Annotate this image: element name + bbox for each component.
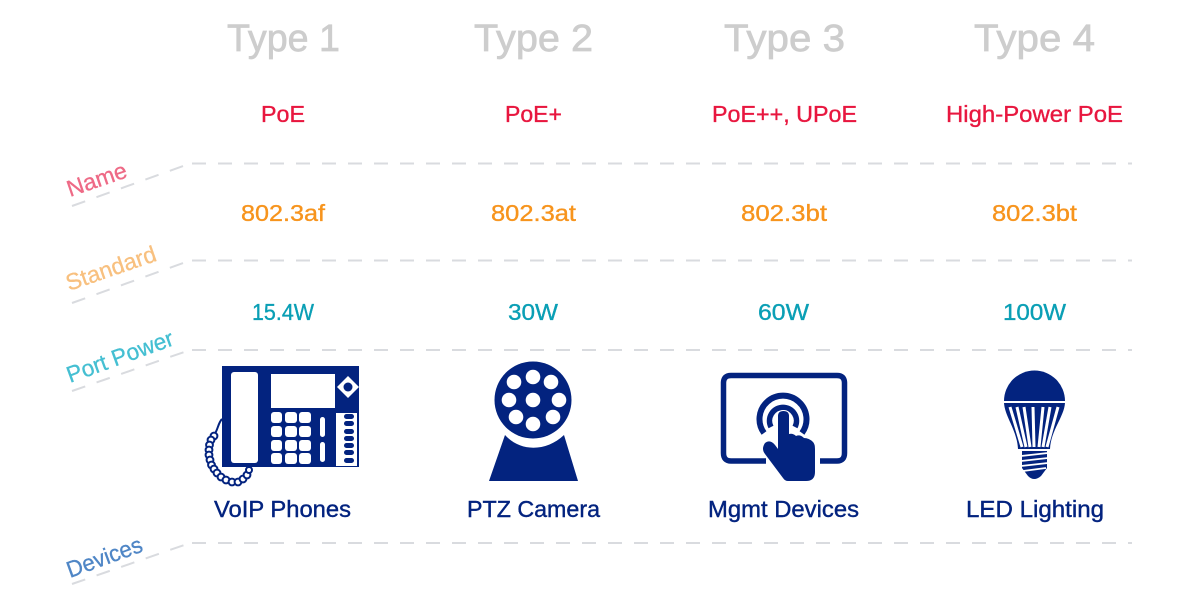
column headings: Type 4 — [974, 18, 1095, 60]
column headings — [227, 18, 1095, 60]
port power row — [252, 299, 1066, 325]
name row: PoE+ — [505, 101, 562, 127]
icon: VoIP phone — [206, 366, 359, 485]
name row: PoE — [261, 101, 305, 127]
column headings: Type 2 — [474, 18, 593, 60]
standard row — [241, 200, 1078, 226]
device names row: PTZ Camera — [467, 496, 600, 522]
icon: PTZ camera — [489, 362, 578, 481]
name row: High-Power PoE — [946, 101, 1123, 127]
row labels: Standard — [62, 241, 160, 296]
row labels: Name — [63, 157, 130, 202]
row labels — [62, 157, 177, 583]
device names row: VoIP Phones — [214, 496, 351, 522]
port power row: 30W — [508, 299, 558, 325]
device names row — [214, 496, 1104, 522]
row labels: Port Power — [63, 325, 177, 388]
row labels: Devices — [63, 531, 146, 583]
name row — [261, 101, 1123, 127]
column headings: Type 1 — [227, 18, 340, 60]
standard row: 802.3bt — [741, 200, 828, 226]
device names row: LED Lighting — [966, 496, 1104, 522]
standard row: 802.3bt — [992, 200, 1078, 226]
icon: touch management device — [724, 376, 844, 481]
device names row: Mgmt Devices — [708, 496, 859, 522]
port power row: 60W — [758, 299, 809, 325]
column headings: Type 3 — [724, 18, 845, 60]
port power row: 15.4W — [252, 299, 314, 325]
icon: LED bulb — [1004, 370, 1065, 479]
standard row: 802.3af — [241, 200, 326, 226]
name row: PoE++, UPoE — [712, 101, 857, 127]
port power row: 100W — [1003, 299, 1066, 325]
standard row: 802.3at — [491, 200, 577, 226]
